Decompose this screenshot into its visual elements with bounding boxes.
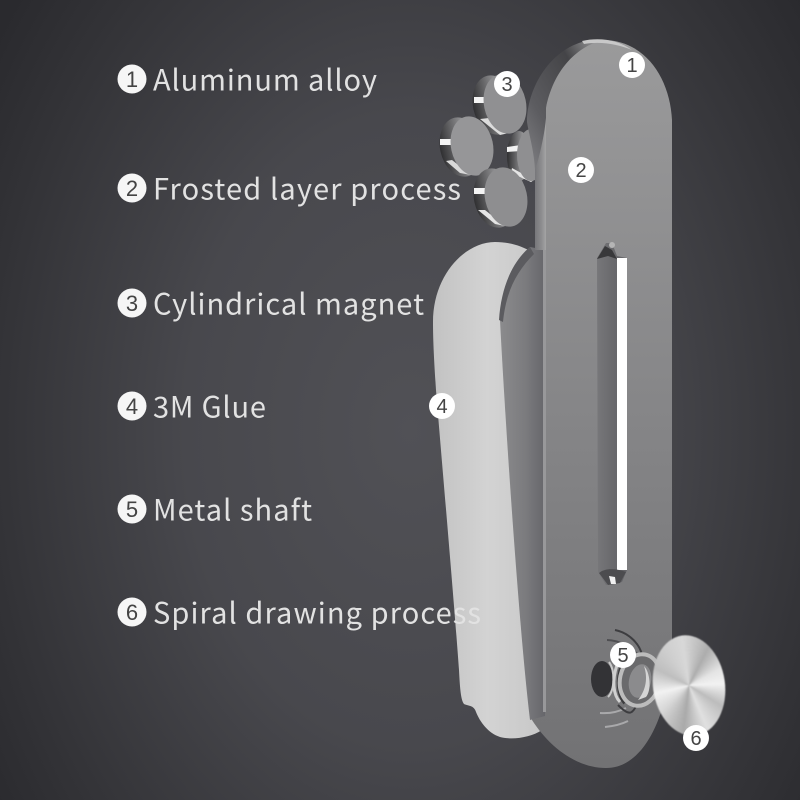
legend item 4: 4: [126, 394, 138, 419]
icon: spiral-drawn metal disk: [646, 630, 732, 741]
cylindrical magnet: right, behind plate: [507, 129, 545, 182]
glue layer: [433, 242, 542, 738]
callout 4: 4: [436, 396, 448, 418]
legend item 5: Metal shaft: [153, 488, 312, 530]
legend item 3: 3: [126, 291, 138, 316]
callout 5: [610, 642, 636, 668]
legend item 1: 1: [126, 67, 138, 92]
bent plate section: [500, 247, 546, 720]
callout 3: 3: [501, 74, 513, 96]
main plate: [532, 40, 672, 768]
top highlight: [582, 39, 632, 50]
callout 2: 2: [575, 160, 587, 182]
cylindrical magnet: left: [434, 112, 499, 181]
legend item 6: 6: [126, 600, 138, 625]
callout 1: [619, 52, 645, 78]
panel: exploded product view: [433, 39, 672, 768]
callout 4: [429, 393, 455, 419]
legend item 1: Aluminum alloy: [153, 58, 377, 100]
legend item 4: 3M Glue: [153, 384, 266, 426]
callout 1: 1: [626, 55, 638, 77]
callout 5: 5: [617, 645, 629, 667]
cylindrical magnet: top: [467, 70, 532, 139]
legend item 2: Frosted layer process: [153, 166, 461, 208]
legend: component list: [118, 58, 481, 632]
plate top rim: [527, 40, 603, 170]
callout 2: [568, 157, 594, 183]
legend item 3: Cylindrical magnet: [153, 282, 424, 324]
callouts on product: [429, 52, 709, 751]
metal shaft: [614, 650, 665, 710]
callout 6: 6: [690, 728, 702, 750]
bent plate highlight edge: [499, 247, 534, 322]
plate side edge: [535, 115, 546, 250]
shaft hole and spiral: [591, 630, 642, 727]
callout 3: [494, 71, 520, 97]
legend item 2: 2: [126, 176, 138, 201]
legend item 6: Spiral drawing process: [153, 590, 481, 632]
plate side highlight line: [543, 250, 546, 712]
legend item 5: 5: [126, 497, 138, 522]
callout 6: [683, 725, 709, 751]
slot: [597, 242, 627, 585]
cylindrical magnet: bottom: [468, 163, 533, 232]
